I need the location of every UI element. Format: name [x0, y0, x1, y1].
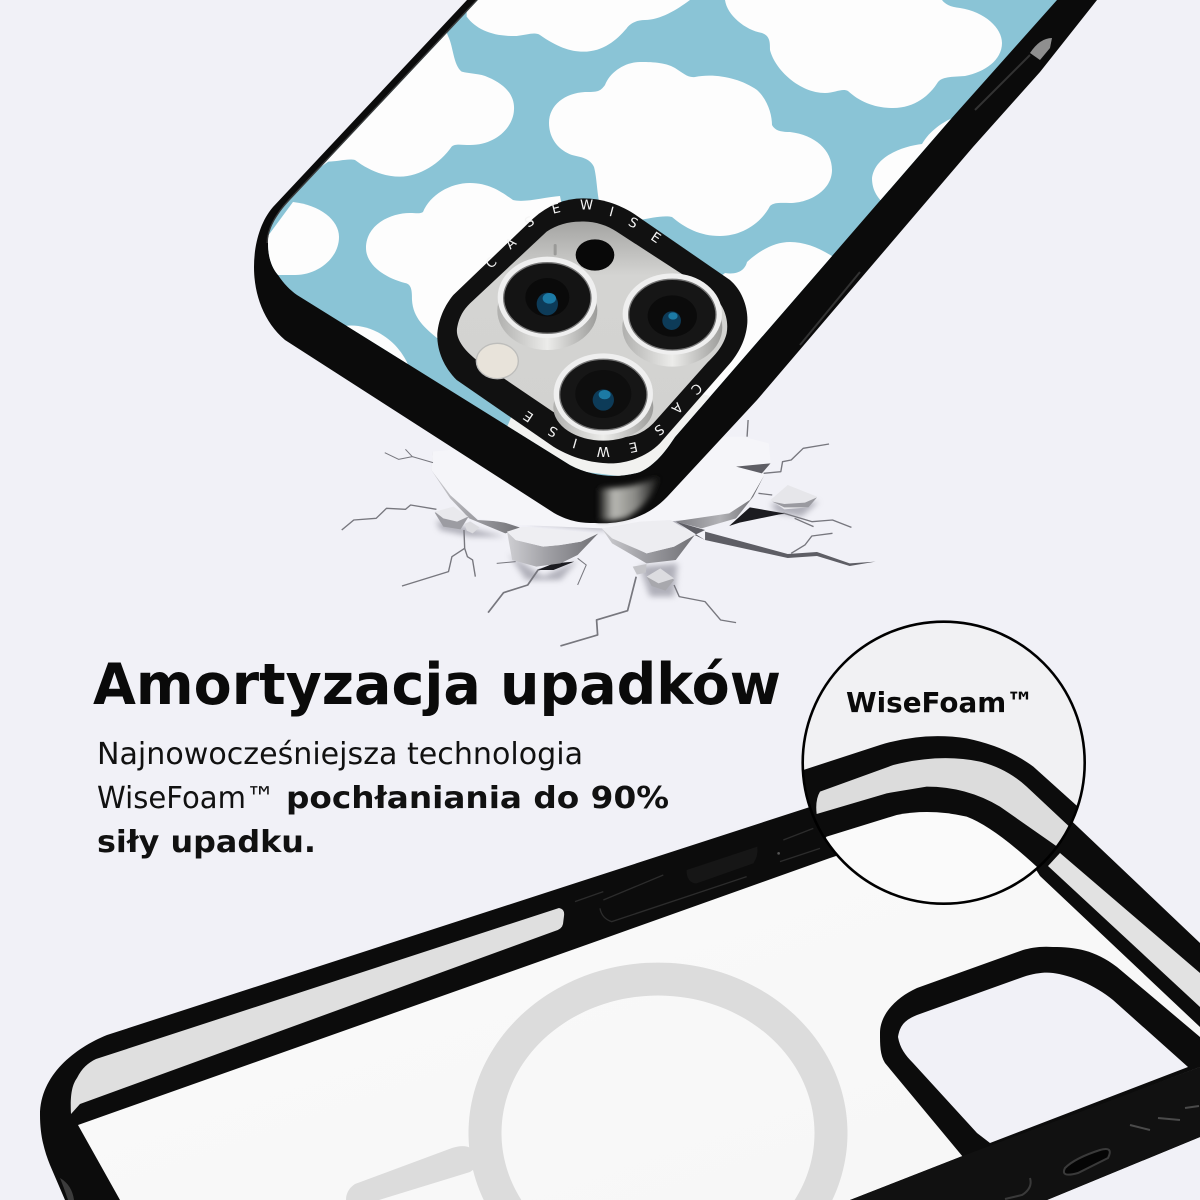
CASEWISE lettering: W	[597, 443, 610, 458]
body copy: Najnowocześniejsza technologia	[97, 737, 583, 772]
CASEWISE lettering: C	[687, 379, 704, 397]
phone with cloud case	[250, 0, 1100, 523]
side strip right	[1048, 853, 1200, 1007]
MagSafe alignment bar	[346, 1146, 478, 1200]
crack wedges	[538, 463, 876, 570]
pin	[554, 244, 557, 255]
lens bottom	[553, 353, 653, 441]
side strip left	[71, 908, 564, 1114]
camera ring	[437, 198, 747, 463]
camera bumper and lenses	[437, 198, 747, 463]
magnified case corner	[804, 736, 1077, 868]
CASEWISE lettering	[483, 199, 704, 458]
camera plate	[457, 222, 727, 437]
camera cutout frame	[880, 947, 1200, 1157]
case bumper	[254, 0, 1097, 523]
bumper rim	[268, 0, 478, 243]
soft shadows	[436, 497, 819, 597]
body copy: siły upadku.	[97, 825, 316, 860]
cracked wall impact	[342, 420, 876, 646]
heading: Amortyzacja upadków	[93, 652, 781, 718]
transparent case with MagSafe ring	[40, 767, 1200, 1200]
CASEWISE lettering: A	[668, 399, 685, 416]
lens top left	[497, 257, 597, 350]
CASEWISE lettering: C	[483, 255, 500, 272]
charging port left	[60, 1178, 74, 1200]
side buttons	[575, 828, 820, 922]
CASEWISE lettering: S	[651, 420, 666, 438]
rubble chunk centre	[602, 520, 695, 563]
body copy	[97, 737, 669, 860]
body copy: WiseFoam™	[97, 781, 275, 816]
CASEWISE lettering: I	[571, 434, 579, 450]
raised wall slabs	[431, 437, 770, 533]
lens right	[622, 273, 722, 367]
camera cutout opening	[898, 973, 1188, 1143]
CASEWISE lettering: E	[648, 230, 663, 247]
magnifier outline	[803, 622, 1085, 904]
cracks	[342, 420, 851, 646]
clear back panel	[78, 815, 1200, 1200]
CASEWISE lettering: A	[503, 236, 520, 253]
side buttons	[800, 38, 1052, 345]
back panel with clouds	[268, 0, 1057, 476]
small debris	[435, 485, 817, 591]
CASEWISE lettering: S	[626, 215, 640, 232]
magnifier callout: WiseFoam	[801, 620, 1086, 905]
CASEWISE lettering: S	[546, 422, 560, 439]
rubble chunk left	[507, 527, 598, 567]
body copy: pochłaniania do 90%	[286, 781, 669, 816]
callout label: WiseFoam™	[846, 686, 1034, 719]
microphone hole	[576, 239, 614, 271]
CASEWISE lettering: E	[627, 438, 639, 454]
CASEWISE lettering: E	[550, 201, 562, 218]
CASEWISE lettering: I	[608, 205, 615, 221]
CASEWISE lettering: S	[522, 214, 538, 231]
clouds	[265, 0, 1002, 480]
flash	[476, 343, 518, 379]
CASEWISE lettering: W	[580, 199, 593, 214]
CASEWISE lettering: E	[521, 407, 537, 424]
blue sliver by camera	[712, 358, 750, 402]
lower side band	[850, 1067, 1200, 1200]
case frame	[40, 767, 1200, 1200]
MagSafe ring	[468, 963, 848, 1200]
bumper highlight	[598, 476, 660, 521]
side ports bottom right	[1005, 1106, 1199, 1199]
